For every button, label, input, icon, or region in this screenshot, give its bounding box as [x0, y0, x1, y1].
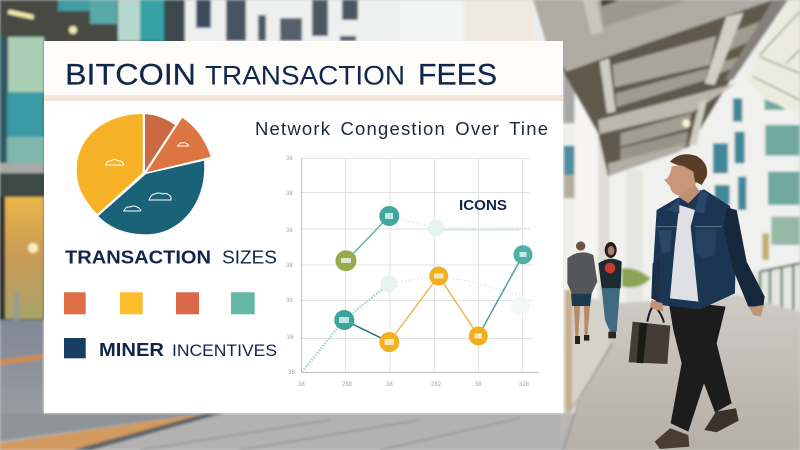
third beam: [608, 143, 688, 176]
y axis labels: 38: [286, 156, 293, 162]
y axis labels: [286, 156, 295, 376]
left glass building: [0, 0, 185, 334]
hands: [650, 300, 764, 317]
panel: infographic card: [44, 41, 563, 413]
woman in dark jacket: [598, 242, 622, 338]
x axis labels: 288: [342, 382, 353, 388]
right building, columns and canopy: [533, 0, 800, 370]
title header band: [44, 41, 563, 96]
top beam: [533, 0, 773, 72]
title word: transaction: TRANSACTION: [205, 60, 405, 90]
person in grey coat: [567, 241, 597, 344]
pie chart: [77, 114, 211, 234]
y axis labels: 38: [286, 191, 293, 197]
y axis labels: 38: [288, 370, 295, 376]
title word: fees: FEES: [418, 58, 497, 92]
panel shadow strip: [565, 290, 572, 410]
axes: [302, 158, 539, 372]
side path: [570, 293, 617, 417]
series lines: [346, 216, 389, 261]
upper white building: [185, 0, 533, 41]
x axis labels: 38: [386, 382, 393, 388]
markers: [336, 250, 356, 271]
x axis labels: 38: [298, 382, 305, 388]
slats: [600, 22, 760, 113]
y axis labels: 38: [286, 263, 293, 269]
diagonal braces: [705, 13, 744, 85]
line chart: [286, 156, 539, 388]
walkway, fence and plants: [560, 263, 800, 450]
main floor: [567, 295, 800, 450]
legend: miner incentives: INCENTIVES: [172, 341, 277, 360]
building and windows: [563, 73, 800, 340]
heading: transaction sizes: SIZES: [222, 248, 277, 268]
y axis labels: 38: [286, 298, 293, 304]
columns: [575, 75, 643, 370]
marker icons: [339, 213, 526, 345]
pale series: [302, 216, 530, 372]
x axis labels: 328: [519, 382, 530, 388]
icons label: ICONS: [459, 198, 507, 214]
header divider: [44, 95, 563, 101]
bag: [629, 306, 670, 364]
trousers: [668, 300, 732, 432]
heading: transaction sizes: TRANSACTION: [65, 248, 211, 268]
background pedestrians: [567, 241, 622, 344]
x axis labels: 282: [431, 382, 442, 388]
slice: teal: [98, 161, 204, 234]
x axis labels: [298, 382, 530, 388]
glass roof: [746, 0, 800, 113]
y axis labels: 38: [287, 335, 294, 341]
slice: orange: [147, 118, 211, 172]
t-shirt: [670, 205, 698, 302]
man walking with bag: [629, 154, 765, 449]
pie icons: [105, 143, 189, 211]
left and bottom paving: [0, 320, 600, 450]
title: BITCOIN: [65, 58, 196, 92]
legend: miner incentives: MINER: [99, 339, 164, 360]
shoes: [655, 408, 739, 449]
collar: [667, 190, 708, 213]
head: [664, 154, 707, 203]
canopy underside: [533, 0, 788, 176]
plant: [622, 268, 651, 287]
lower slats: [620, 113, 691, 162]
legend: miner incentives: [64, 338, 277, 360]
legend swatches: [64, 292, 255, 314]
slice: brown: [145, 114, 175, 171]
y axis labels: 38: [286, 228, 293, 234]
second beam: [598, 83, 736, 134]
chart heading: Network Congestion Over Tine: [255, 118, 548, 139]
heading: transaction sizes: [65, 248, 277, 268]
fence: [735, 263, 800, 312]
x axis labels: 38: [475, 382, 482, 388]
pale markers: [380, 220, 530, 316]
slice: yellow: [77, 114, 143, 214]
denim jacket: [651, 189, 765, 309]
lamps: [682, 119, 690, 127]
grid: [302, 158, 533, 373]
